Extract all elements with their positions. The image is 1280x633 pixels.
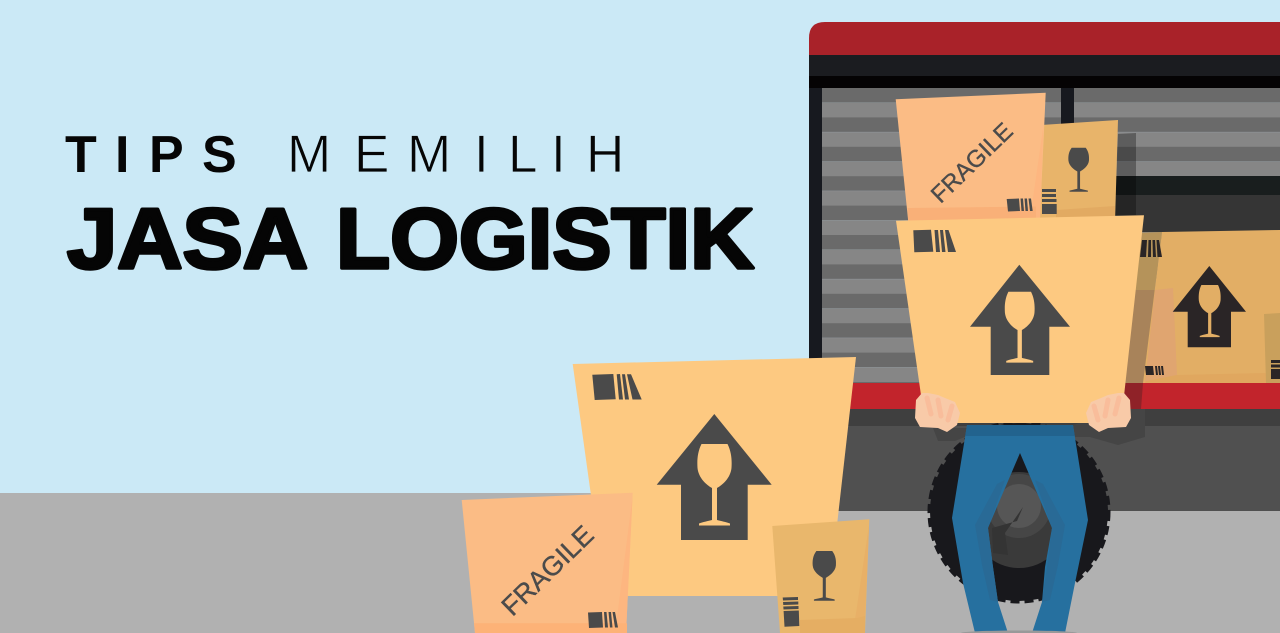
sky background: [0, 0, 1280, 494]
ground large box: [573, 357, 856, 596]
barcode: [1007, 198, 1033, 212]
box edge shading: [855, 525, 869, 620]
box body: [772, 519, 869, 633]
small box barcode: [1271, 360, 1280, 379]
arrow icon: [970, 265, 1070, 375]
truck: [809, 22, 1280, 511]
truck header bar: [809, 55, 1280, 88]
tread: [930, 422, 1108, 602]
small box corner: [1264, 313, 1280, 383]
left hand: [915, 393, 960, 432]
shutter divider: [1061, 88, 1074, 128]
stack shadow on shutter: [1115, 133, 1136, 215]
arm shadow: [933, 409, 1145, 445]
foot shadow: [961, 630, 1077, 633]
glass icon: [1005, 292, 1035, 363]
title line: jasa logistik: [67, 192, 754, 287]
cargo box on truck, right: [1118, 230, 1280, 409]
barcode: [913, 230, 956, 252]
box edge shading: [615, 497, 632, 633]
barcode top: [1140, 240, 1162, 257]
glass icon: [813, 551, 836, 601]
box body: [896, 93, 1046, 222]
cast shadow: [1120, 232, 1162, 383]
barcode: [1042, 189, 1057, 214]
person: [933, 409, 1145, 633]
title: [65, 125, 754, 287]
barcode bottom: [1145, 366, 1164, 375]
box body: [1143, 230, 1280, 383]
jeans: [952, 425, 1088, 633]
top fragile box: [896, 93, 1046, 222]
arrow icon: [1173, 266, 1246, 347]
red band: [822, 383, 1280, 409]
tire: [930, 422, 1108, 602]
knee shading: [975, 480, 1065, 602]
barcode: [592, 374, 642, 400]
title line: jasa logistik: JASA: [67, 192, 308, 287]
box body: [573, 357, 856, 596]
inner box sliver: [1145, 288, 1177, 382]
tire body: [930, 423, 1108, 601]
lower cast shadow: [1120, 290, 1155, 383]
box strip: [474, 623, 627, 633]
glass icon: [697, 444, 732, 526]
box strip: [800, 616, 865, 633]
barcode: [588, 612, 618, 628]
shadow on red band: [1118, 383, 1143, 409]
hub: [971, 472, 1067, 568]
title line: jasa logistik: LOGISTIK: [336, 192, 754, 287]
ground fragile box: [462, 493, 633, 633]
box body: [1036, 120, 1118, 222]
arrow icon: [657, 414, 772, 540]
truck lower body: [830, 409, 1280, 511]
top small box: [1036, 120, 1118, 222]
glass icon: [1199, 285, 1221, 337]
ground small box: [772, 519, 869, 633]
glass icon: [1068, 148, 1089, 192]
truck post: [809, 88, 822, 383]
dark cargo opening: [1115, 176, 1280, 232]
truck roof: [809, 22, 1280, 55]
ground: [0, 493, 1280, 633]
title line: tips memilih: [65, 125, 624, 184]
jeans waist shading: [965, 425, 1075, 436]
carried large box: [896, 215, 1144, 423]
right hand: [1086, 393, 1131, 432]
box strip: [908, 206, 1036, 222]
box strip: [1056, 206, 1115, 222]
fragile label: FRAGILE: [496, 520, 600, 622]
title line: tips memilih: MEMILIH: [287, 125, 624, 184]
roller shutter: [822, 88, 1280, 383]
barcode: [783, 597, 799, 627]
box body: [896, 215, 1144, 423]
box body: [462, 493, 633, 633]
fragile label: FRAGILE: [926, 118, 1019, 209]
box lower strip: [1145, 373, 1280, 383]
box edge shading: [1030, 125, 1044, 219]
title line: tips memilih: TIPS: [65, 126, 237, 184]
